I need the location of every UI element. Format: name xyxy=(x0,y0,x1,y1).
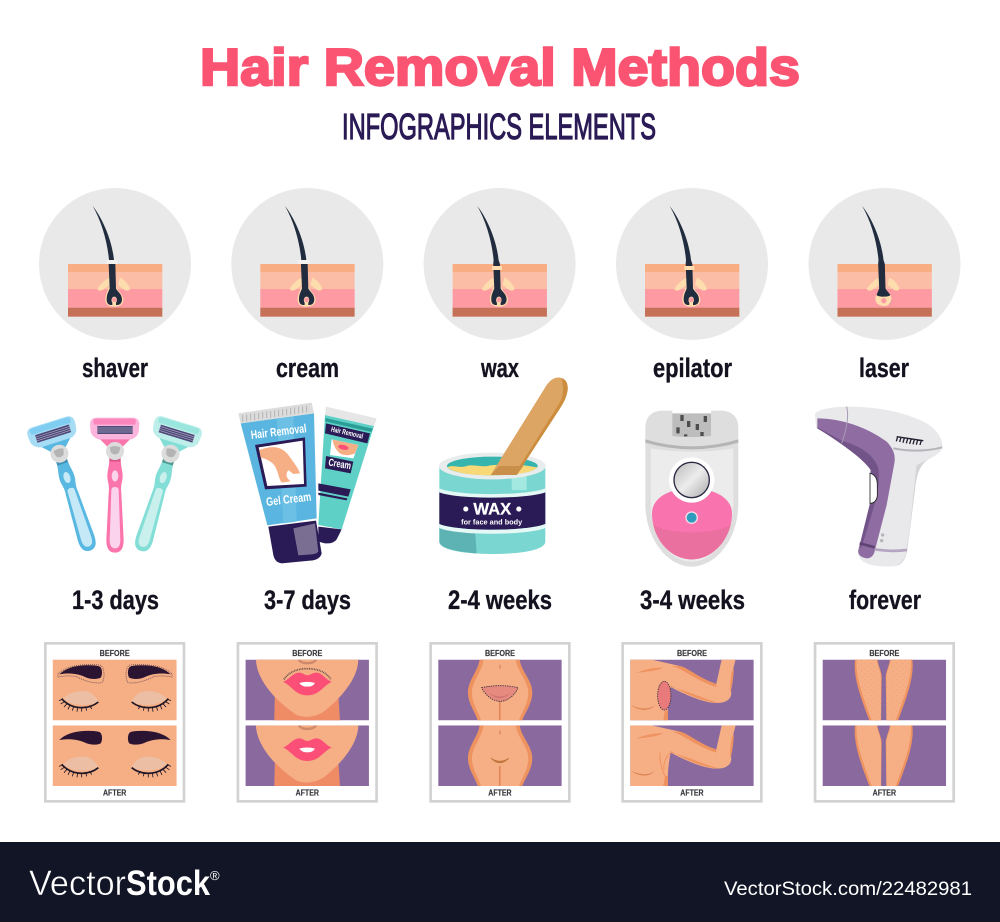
hair diagram: shaver xyxy=(39,188,191,340)
jar body xyxy=(439,466,545,554)
panel: legs before and after: AFTER xyxy=(873,789,896,798)
panel: lips before and after: BEFORE xyxy=(292,649,323,658)
label: epilator: epilator xyxy=(653,353,732,383)
panel: lips before and after: AFTER xyxy=(296,789,319,798)
label: 3-7 days: 3-7 days xyxy=(264,585,351,615)
panel: eyebrows before and after: BEFORE xyxy=(100,649,130,658)
small tube: Cream xyxy=(327,457,352,472)
panel: underarm before and after: AFTER xyxy=(680,789,704,798)
spatula xyxy=(491,378,568,475)
icon: wax jar with spatula xyxy=(439,378,568,554)
panel: eyebrows before and after: AFTER xyxy=(103,789,127,798)
icon: three razors xyxy=(26,415,204,558)
icon: cream tubes xyxy=(238,403,377,563)
footer logo: Vector xyxy=(29,864,126,903)
icon: wax jar with spatula: for face and body xyxy=(461,518,523,527)
icon: epilator xyxy=(645,409,738,567)
big tube: Hair Removal xyxy=(250,421,307,442)
panel: bikini area before and after xyxy=(431,643,569,801)
hair diagram: cream xyxy=(231,188,383,340)
label: shaver: shaver xyxy=(82,353,148,383)
rim and inside xyxy=(439,453,546,479)
hair diagram: epilator xyxy=(616,188,768,340)
label: wax: wax xyxy=(480,353,519,383)
label: 1-3 days: 1-3 days xyxy=(72,585,159,615)
panel: legs before and after xyxy=(815,643,954,801)
footer logo xyxy=(29,864,220,903)
icon: laser device xyxy=(815,407,942,566)
panel: eyebrows before and after xyxy=(45,643,184,801)
label: 3-4 weeks: 3-4 weeks xyxy=(640,585,745,615)
footer logo: Stock xyxy=(126,864,210,903)
panel: underarm before and after: BEFORE xyxy=(677,649,708,658)
panel: bikini area before and after: BEFORE xyxy=(485,649,516,658)
hair diagram: laser xyxy=(808,188,960,340)
small tube xyxy=(318,407,377,543)
label: laser: laser xyxy=(859,353,909,383)
panel: bikini area before and after: AFTER xyxy=(488,789,512,798)
panel: lips before and after xyxy=(238,643,377,801)
subtitle: INFOGRAPHICS ELEMENTS xyxy=(342,106,656,147)
label: 2-4 weeks: 2-4 weeks xyxy=(448,585,552,615)
label: forever: forever xyxy=(849,585,921,615)
footer image id: VectorStock.com/22482981 xyxy=(724,878,972,900)
big tube: Gel Cream xyxy=(265,490,312,509)
footer logo: ® xyxy=(210,868,220,883)
panel: legs before and after: BEFORE xyxy=(869,649,900,658)
label: cream: cream xyxy=(276,353,339,383)
label band xyxy=(439,488,545,498)
big tube xyxy=(238,403,322,563)
small tube: Hair Removal xyxy=(330,425,364,441)
icon: wax jar with spatula: • WAX • xyxy=(463,500,522,519)
panel: underarm before and after xyxy=(623,643,761,801)
footer band xyxy=(0,842,1000,922)
hair diagram: wax xyxy=(424,188,576,340)
title: Hair Removal Methods xyxy=(200,39,800,97)
